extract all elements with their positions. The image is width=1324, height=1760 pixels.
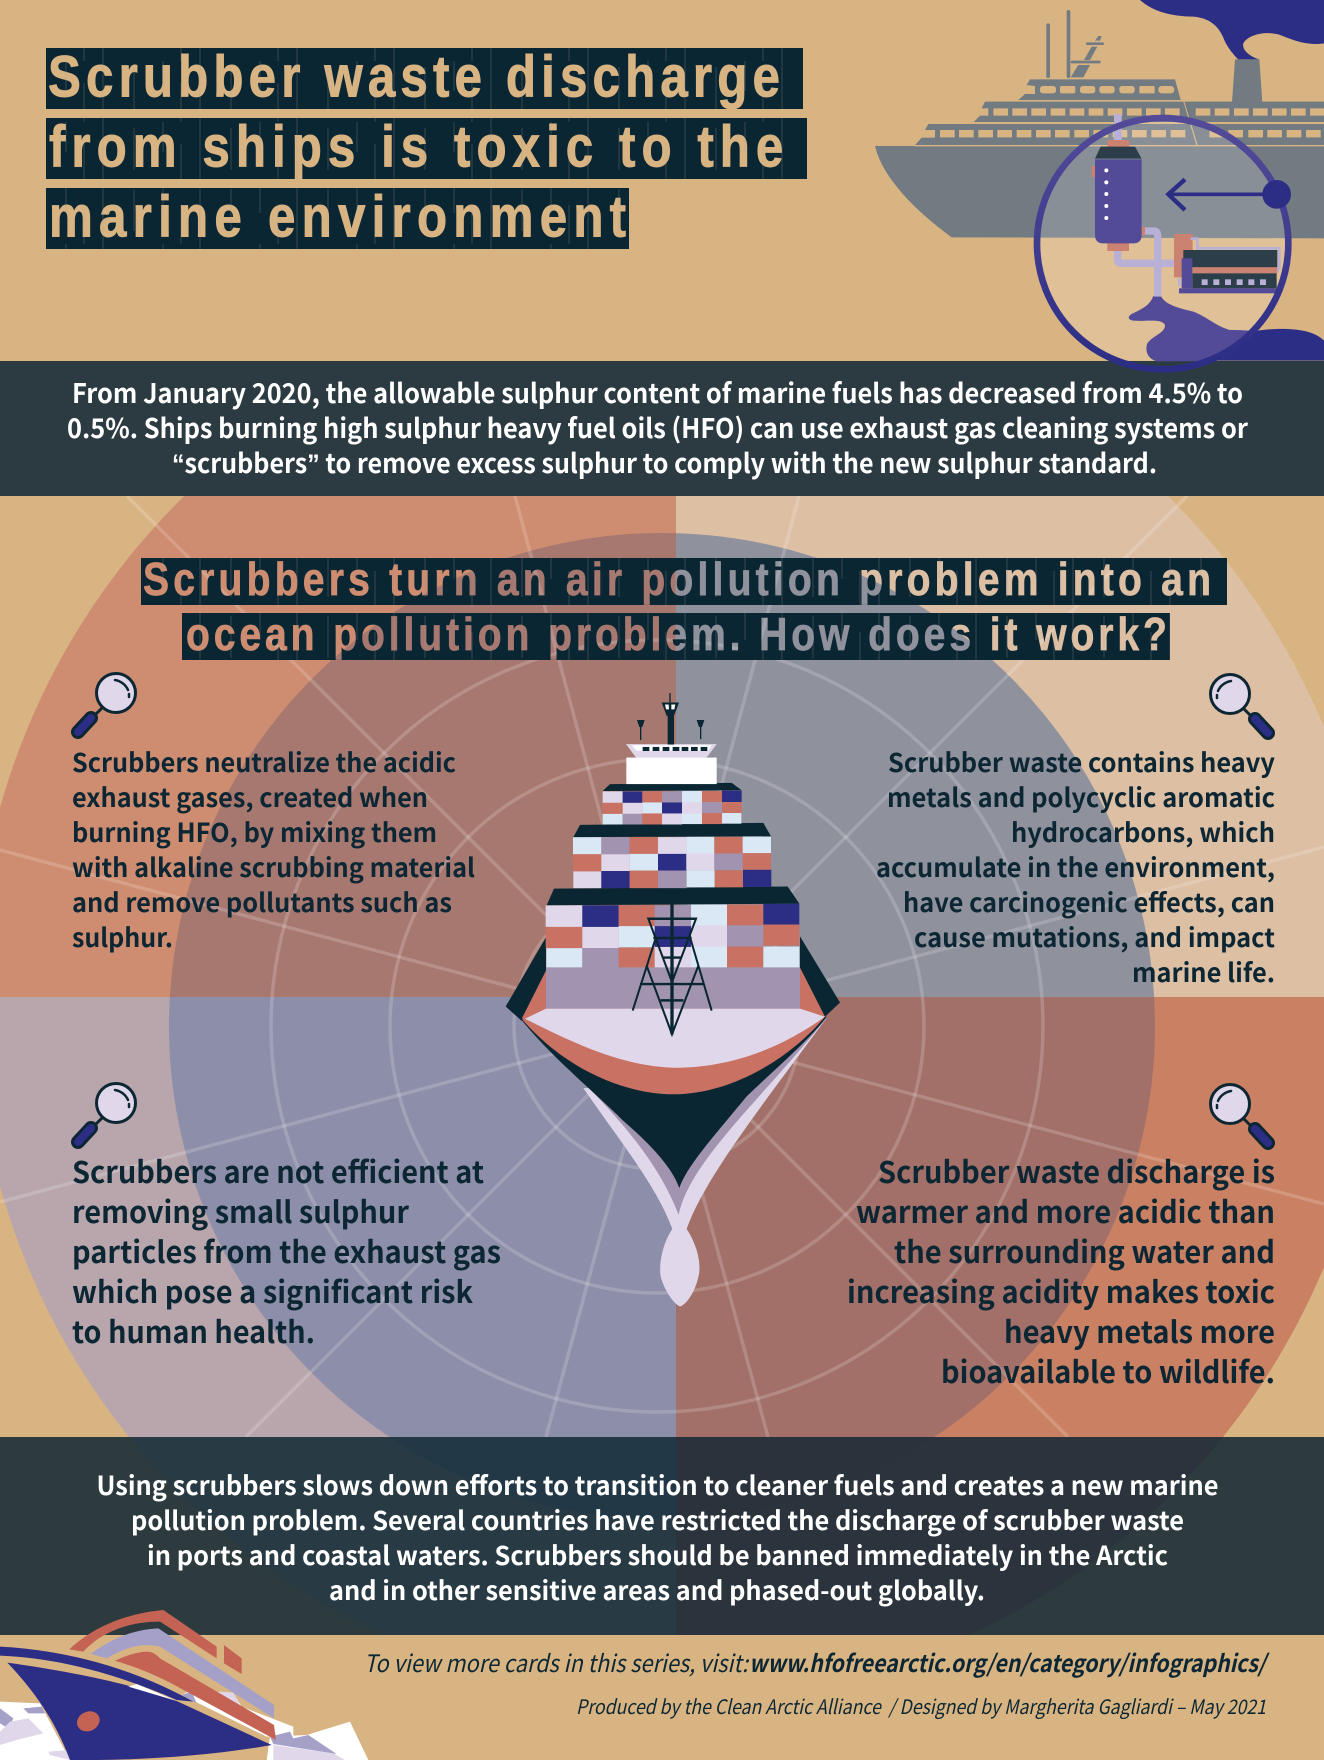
text block: hydrocarbons, which [1011,813,1275,850]
text block: the surrounding water and [894,1228,1275,1272]
text block: and remove pollutants such as [72,883,452,920]
text block [847,1148,1275,1392]
text block: exhaust gases, created when [72,778,428,815]
lattice mast [633,904,712,1034]
subheading: Scrubbers turn an air pollution problem into an [143,554,1211,606]
title: marine environment [49,185,626,249]
superstructure [69,1610,276,1740]
porthole [74,1708,103,1735]
discharge [1128,296,1249,362]
text block: which pose a significant risk [72,1268,473,1312]
tier 3 containers [546,887,799,967]
closing text: in ports and coastal waters. Scrubbers should be banned immediately in the Arctic [147,1536,1168,1573]
text block [72,743,475,955]
closing text: pollution problem. Several countries have restricted the discharge of scrubber waste [131,1501,1184,1538]
arrow [1168,179,1291,210]
footer credits: To view more cards in this series, visit: [364,1644,749,1679]
smoke [1140,0,1324,59]
title: Scrubber waste discharge [48,45,780,109]
tier 1 containers [603,783,742,824]
text block: metals and polycyclic aromatic [887,778,1275,815]
text block: sulphur. [72,918,173,955]
lens ring [1037,118,1288,369]
magnifier lens interior [1040,122,1285,362]
ship silhouette [875,10,1324,238]
closing band [0,1437,1324,1635]
text block: Scrubbers are not efficient at [72,1148,484,1192]
deck [525,1009,825,1068]
intro text [67,372,1248,481]
hull [7,1663,272,1760]
closing text: Using scrubbers slows down efforts to transition to cleaner fuels and creates a new marine [96,1466,1218,1503]
text block: increasing acidity makes toxic [847,1268,1275,1312]
ship windows [915,86,1324,146]
title [46,45,807,249]
grey block [546,967,800,1009]
navy discharge blob [1213,329,1324,361]
intro text: From January 2020, the allowable sulphur content of marine fuels has decreased from 4.5% to [72,372,1243,411]
scrubber unit [1092,114,1175,297]
text block: particles from the exhaust gas [72,1228,501,1272]
panel: heavy metals [876,674,1275,990]
tier 2 containers [573,823,771,888]
intro band [0,361,1324,496]
icon: magnifier [1210,674,1268,733]
text block: marine life. [1132,953,1275,990]
panel: small particles [72,1084,501,1352]
text block: heavy metals more [1004,1308,1275,1352]
text block: removing small sulphur [72,1188,410,1232]
bulb [660,1229,699,1307]
text block: with alkaline scrubbing material [72,848,475,885]
footer credits: www.hfofreearctic.org/en/category/infographics/ [749,1644,1270,1679]
icon: magnifier [78,674,136,732]
side wings [506,936,840,1021]
text block [72,1148,501,1352]
illustration: container ship from above [506,693,840,1307]
text block: burning HFO, by mixing them [72,813,437,850]
closing text: and in other sensitive areas and phased-out globally. [329,1571,985,1608]
text block: cause mutations, and impact [914,918,1275,955]
icon: magnifier [1210,1084,1268,1143]
title: from ships is toxic to the [49,115,783,179]
panel: acidity [847,1084,1275,1392]
subheading [141,554,1227,661]
text block: have carcinogenic effects, can [903,883,1275,920]
intro text: “scrubbers” to remove excess sulphur to comply with the new sulphur standard. [172,442,1157,481]
panel: neutralize [72,674,475,955]
engine [1174,234,1279,293]
text block: Scrubber waste contains heavy [888,743,1275,780]
icon: magnifier [78,1084,136,1142]
water [0,1690,368,1760]
text block: to human health. [72,1308,315,1352]
subheading: ocean pollution problem. How does it work? [186,609,1167,661]
wake [583,1018,827,1229]
text block [876,743,1275,990]
text block: warmer and more acidic than [856,1188,1275,1232]
intro text: 0.5%. Ships burning high sulphur heavy fuel oils (HFO) can use exhaust gas cleaning systems or [67,407,1248,446]
closing text [96,1466,1218,1608]
dark hull [521,1017,827,1188]
text block: bioavailable to wildlife. [941,1348,1275,1392]
illustration: cruise ship with scrubber magnifier [875,0,1324,369]
red hull [522,1007,826,1094]
text block: Scrubber waste discharge is [878,1148,1275,1192]
bridge [626,693,717,784]
text block: accumulate in the environment, [876,848,1275,885]
text block: Scrubbers neutralize the acidic [72,743,456,780]
background with quadrants and polar grid [0,496,1324,1437]
illustration: bow of ship in waves [0,1610,368,1760]
footer credits [364,1644,1270,1720]
